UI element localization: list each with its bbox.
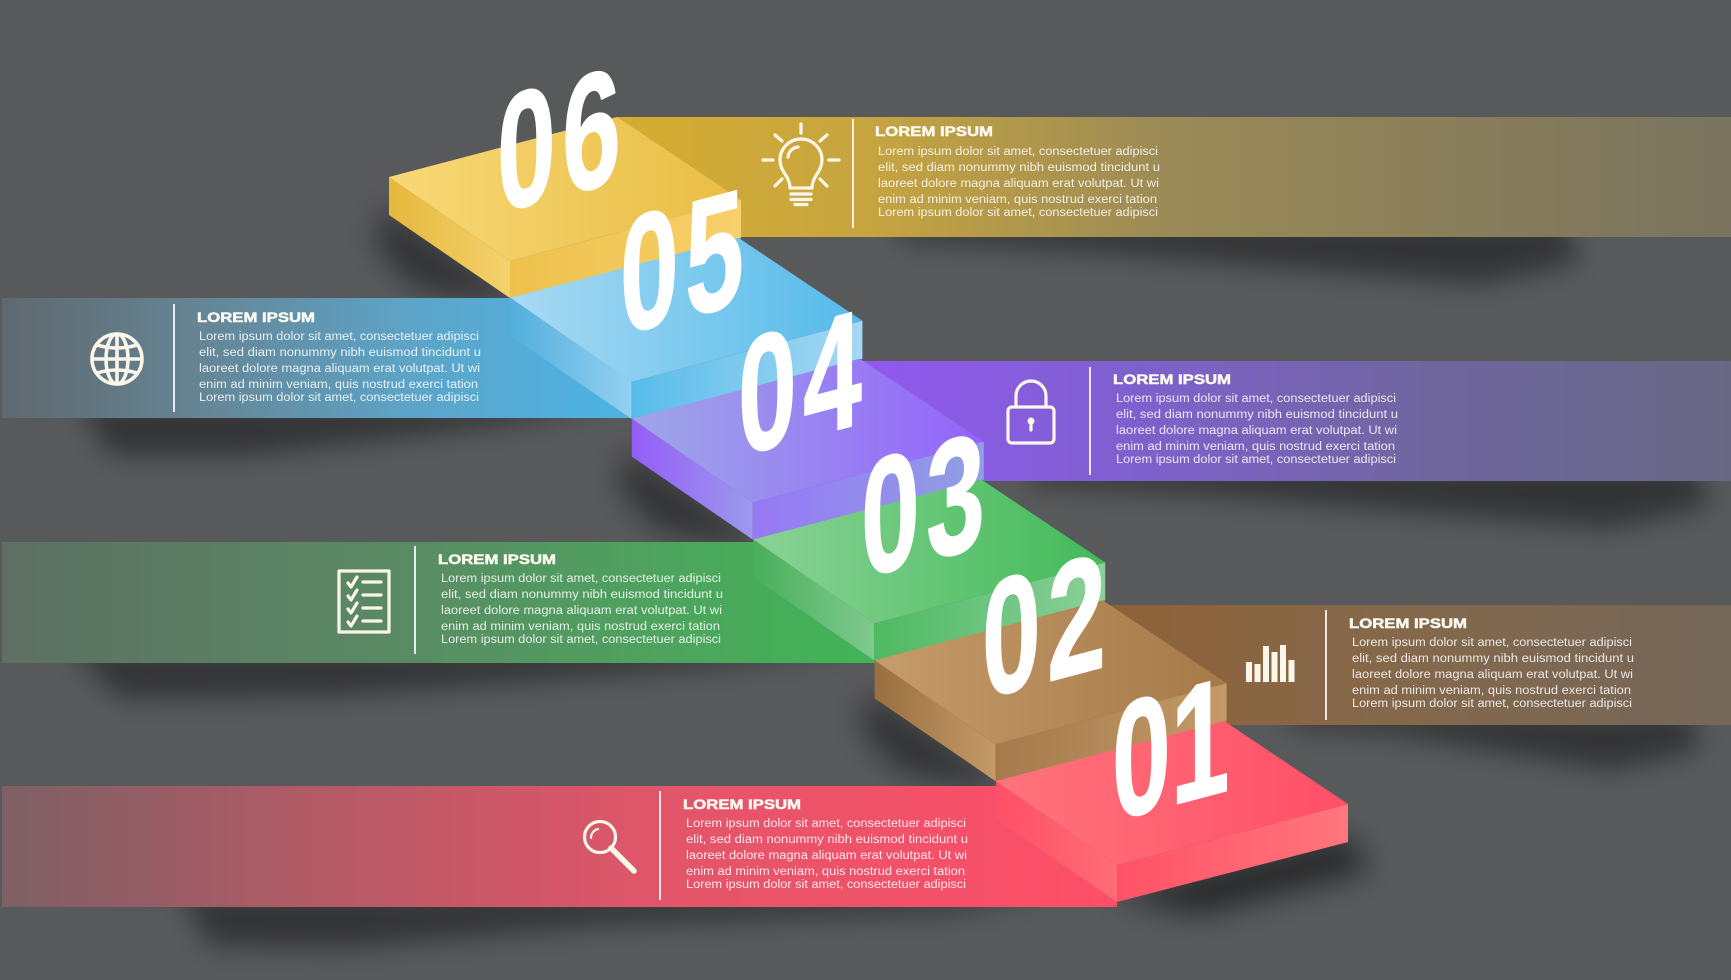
text block 03: Lorem ipsum dolor sit amet, consectetuer adipisci [441,634,721,646]
number 04: 04 [738,272,868,491]
isometric step 02 [875,600,1227,781]
soft shadows beneath bands and steps [70,207,1710,948]
text block 02: Lorem ipsum dolor sit amet, consectetuer adipisci [1352,698,1632,710]
number 03: 03 [861,394,991,613]
number 06: 06 [497,29,627,248]
heading 04: LOREM IPSUM [1113,372,1231,387]
text block 01: enim ad minim veniam, quis nostrud exerci tation [686,866,965,878]
text block 05: enim ad minim veniam, quis nostrud exerci tation [199,379,478,391]
icon: padlock [1008,381,1054,443]
text block 01: elit, sed diam nonummy nibh euismod tincidunt u [686,834,968,846]
text block 03 [441,573,723,646]
heading 03: LOREM IPSUM [438,552,556,567]
text block 06 [878,146,1160,219]
number 02: 02 [982,515,1112,734]
number 01: 01 [1112,640,1229,856]
text block 01 [686,818,968,891]
text block 06: elit, sed diam nonummy nibh euismod tincidunt u [878,162,1160,174]
heading 02: LOREM IPSUM [1349,616,1467,631]
isometric step 03 [753,479,1105,660]
icon: globe [92,334,142,384]
text block 05: laoreet dolore magna aliquam erat volutpat. Ut wi [199,363,480,375]
icon: magnifier [584,822,634,871]
panel: band 05 [2,298,632,418]
text block 04: enim ad minim veniam, quis nostrud exerci tation [1116,441,1395,453]
text block 01: Lorem ipsum dolor sit amet, consectetuer adipisci [686,818,966,830]
text block 06: Lorem ipsum dolor sit amet, consectetuer adipisci [878,146,1158,158]
panel: band 03 [2,542,875,663]
panel: band 06 [617,117,1731,237]
icon: checklist [339,571,389,632]
panel: band 01 [2,786,1117,907]
number 05: 05 [620,151,750,370]
text block 05: Lorem ipsum dolor sit amet, consectetuer adipisci [199,331,479,343]
text block 05: elit, sed diam nonummy nibh euismod tincidunt u [199,347,481,359]
text block 05 [199,331,481,404]
text block 06: laoreet dolore magna aliquam erat volutpat. Ut wi [878,178,1159,190]
isometric step 06 [389,117,741,298]
text block 02: laoreet dolore magna aliquam erat volutpat. Ut wi [1352,669,1633,681]
isometric step 04 [632,359,984,540]
text block 06: enim ad minim veniam, quis nostrud exerci tation [878,194,1157,206]
text block 02: Lorem ipsum dolor sit amet, consectetuer adipisci [1352,637,1632,649]
text block 01: laoreet dolore magna aliquam erat volutpat. Ut wi [686,850,967,862]
text block 05: Lorem ipsum dolor sit amet, consectetuer adipisci [199,392,479,404]
text block 04: Lorem ipsum dolor sit amet, consectetuer adipisci [1116,393,1396,405]
heading 01: LOREM IPSUM [683,797,801,812]
heading 06: LOREM IPSUM [875,124,993,139]
text block 02: elit, sed diam nonummy nibh euismod tincidunt u [1352,653,1634,665]
icon: bar chart [1246,645,1294,682]
heading 05: LOREM IPSUM [197,310,315,325]
isometric step 05 [510,238,862,419]
panel: band 02 [1105,605,1731,725]
text block 01: Lorem ipsum dolor sit amet, consectetuer adipisci [686,879,966,891]
text block 04: elit, sed diam nonummy nibh euismod tincidunt u [1116,409,1398,421]
text block 04: Lorem ipsum dolor sit amet, consectetuer adipisci [1116,454,1396,466]
panel: band 04 [861,361,1731,481]
icon: light bulb [763,124,839,204]
text block 03: enim ad minim veniam, quis nostrud exerci tation [441,621,720,633]
text block 03: Lorem ipsum dolor sit amet, consectetuer adipisci [441,573,721,585]
text block 03: laoreet dolore magna aliquam erat volutpat. Ut wi [441,605,722,617]
text block 06: Lorem ipsum dolor sit amet, consectetuer adipisci [878,207,1158,219]
text block 02: enim ad minim veniam, quis nostrud exerci tation [1352,685,1631,697]
text block 03: elit, sed diam nonummy nibh euismod tincidunt u [441,589,723,601]
text block 02 [1352,637,1634,710]
text block 04 [1116,393,1398,466]
text block 04: laoreet dolore magna aliquam erat volutpat. Ut wi [1116,425,1397,437]
isometric step 01 [996,721,1348,902]
